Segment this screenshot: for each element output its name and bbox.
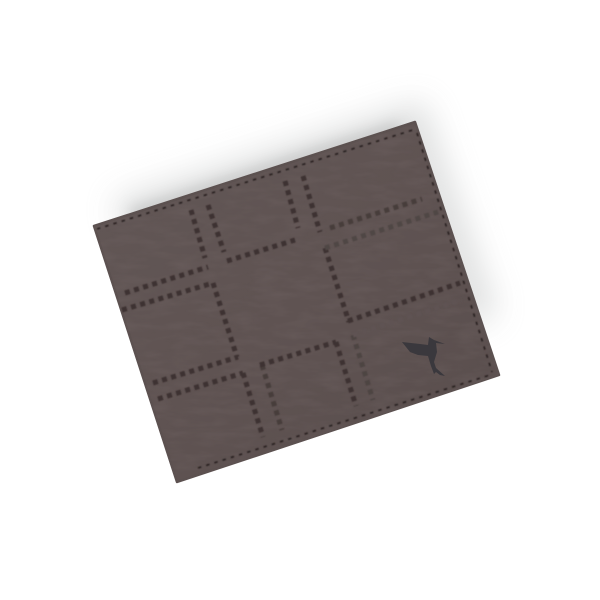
right vertical pair [285, 176, 373, 406]
shadow halo [120, 124, 480, 320]
embossed square-stitch grid [122, 176, 462, 437]
wallet body [85, 115, 510, 490]
left vertical pair [191, 205, 282, 437]
icon: hummingbird logo [402, 337, 445, 376]
upper horizontal pair [122, 199, 438, 310]
lower horizontal pair [153, 283, 462, 399]
outer stitching [97, 129, 492, 468]
wallet product photo [92, 98, 500, 484]
